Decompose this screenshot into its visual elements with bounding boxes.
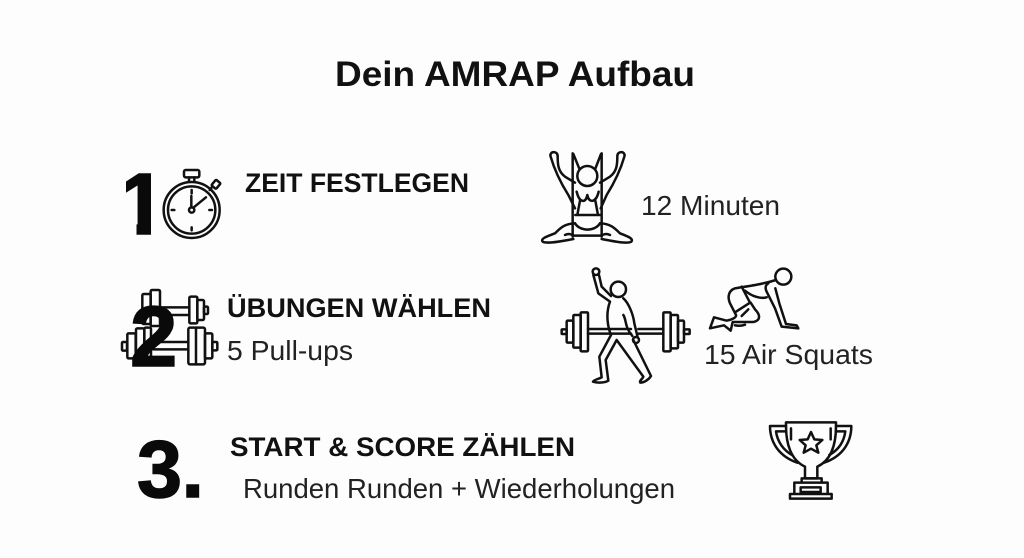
icon: figure with barbell [562,268,690,383]
text: 5 Pull-ups: 5 Pull-ups [227,335,353,366]
infographic canvas [120,60,872,504]
icon: trophy [770,422,851,499]
heading: Start & Score zählen: START & SCORE ZÄHLEN [230,432,575,462]
step 1 [118,152,780,253]
icon: figure on all fours [710,269,798,331]
step number 3: 3. [137,425,204,515]
step 2 [122,268,873,385]
text: 15 Air Squats: 15 Air Squats [704,339,873,370]
title: Dein AMRAP Aufbau [335,55,695,94]
heading: Zeit festlegen: ZEIT FESTLEGEN [245,168,469,198]
icon: dumbbells [122,290,217,364]
text: 12 Minuten: 12 Minuten [641,190,780,221]
step 3 [137,422,851,515]
icon: stopwatch [164,170,221,238]
heading: Übungen wählen: ÜBUNGEN WÄHLEN [227,293,491,323]
text: Runden + Wiederholungen: Runden Runden + Wiederholungen [243,473,675,504]
step number 1: 1 [118,156,166,253]
icon: figure with strap [542,152,632,243]
step number 2: 2 [130,290,177,385]
